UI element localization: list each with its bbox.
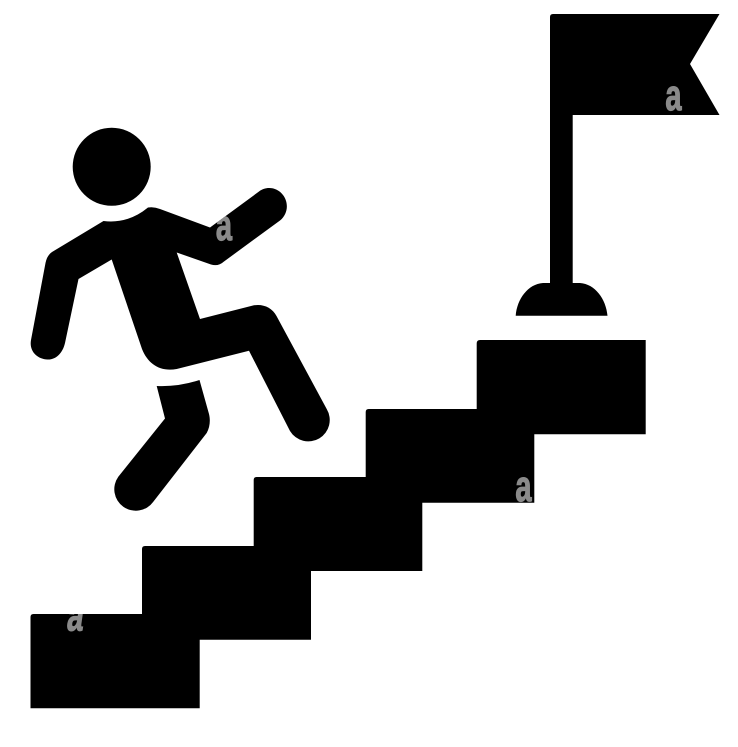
watermark on flag: a bbox=[665, 70, 682, 119]
watermark letters bbox=[65, 70, 682, 640]
staircase bbox=[30, 340, 646, 708]
watermark on arm: a bbox=[216, 200, 232, 249]
watermark on stair: a bbox=[515, 461, 532, 510]
figure torso, arms and raised leg bbox=[31, 188, 330, 441]
figure head bbox=[73, 128, 151, 206]
icon: flag on pole with base bbox=[516, 14, 720, 316]
icon: running figure bbox=[31, 128, 330, 511]
watermark on bottom stair: a bbox=[65, 591, 89, 640]
figure lower leg bbox=[114, 380, 210, 511]
